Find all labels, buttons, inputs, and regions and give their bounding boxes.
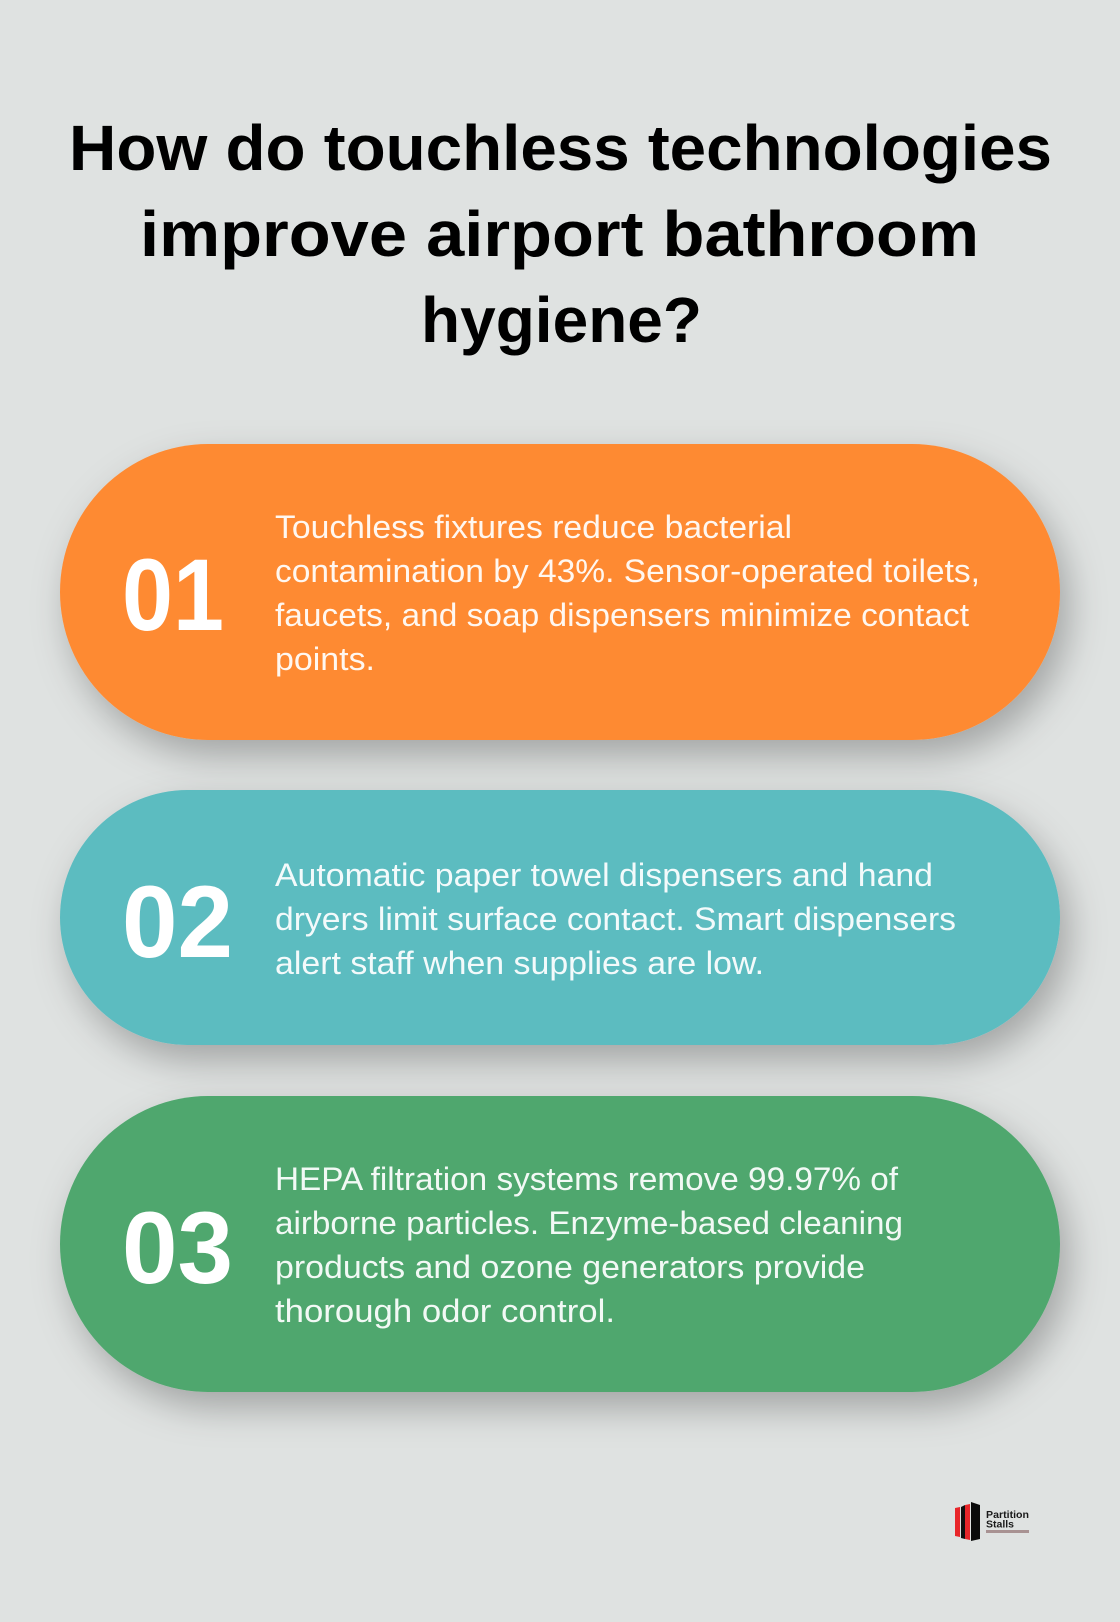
panel: step 03 [60,1096,1060,1392]
pill background green [60,1096,1060,1392]
pill background teal [60,790,1060,1045]
text block 03: HEPA filtration systems remove 99.97% of [275,1161,899,1197]
text block 01: faucets, and soap dispensers minimize contact [275,597,969,633]
text block 02: alert staff when supplies are low. [275,945,764,981]
number 03: 03 [122,1191,233,1305]
pill background orange [60,444,1060,740]
number 02: 02 [122,865,233,979]
text block 01: Touchless fixtures reduce bacterial [275,509,792,545]
text block 03: products and ozone generators provide [275,1249,865,1285]
text block 03: airborne particles. Enzyme-based cleaning [275,1205,903,1241]
text block 01: contamination by 43%. Sensor-operated toilets, [275,553,980,589]
text block 02: dryers limit surface contact. Smart dispensers [275,901,956,937]
text block 03: thorough odor control. [275,1293,615,1329]
text block 02: Automatic paper towel dispensers and hand [275,857,933,893]
icon: partition bars [955,1502,980,1541]
logo wordmark [986,1510,1029,1533]
logo wordmark: Stalls [986,1520,1014,1530]
title: hygiene? [421,284,702,356]
panel: step 02 [60,790,1060,1045]
number 01: 01 [122,538,224,652]
logo wordmark: Partition [986,1510,1029,1521]
title: improve airport bathroom [140,198,979,270]
title [69,112,1052,356]
text block 01 [275,509,980,677]
text block 03 [275,1161,903,1329]
title: How do touchless technologies [69,112,1052,184]
text block 01: points. [275,641,375,677]
text block 02 [275,857,956,981]
panel: step 01 [60,444,1060,740]
logo: Partition Stalls [955,1502,1029,1541]
